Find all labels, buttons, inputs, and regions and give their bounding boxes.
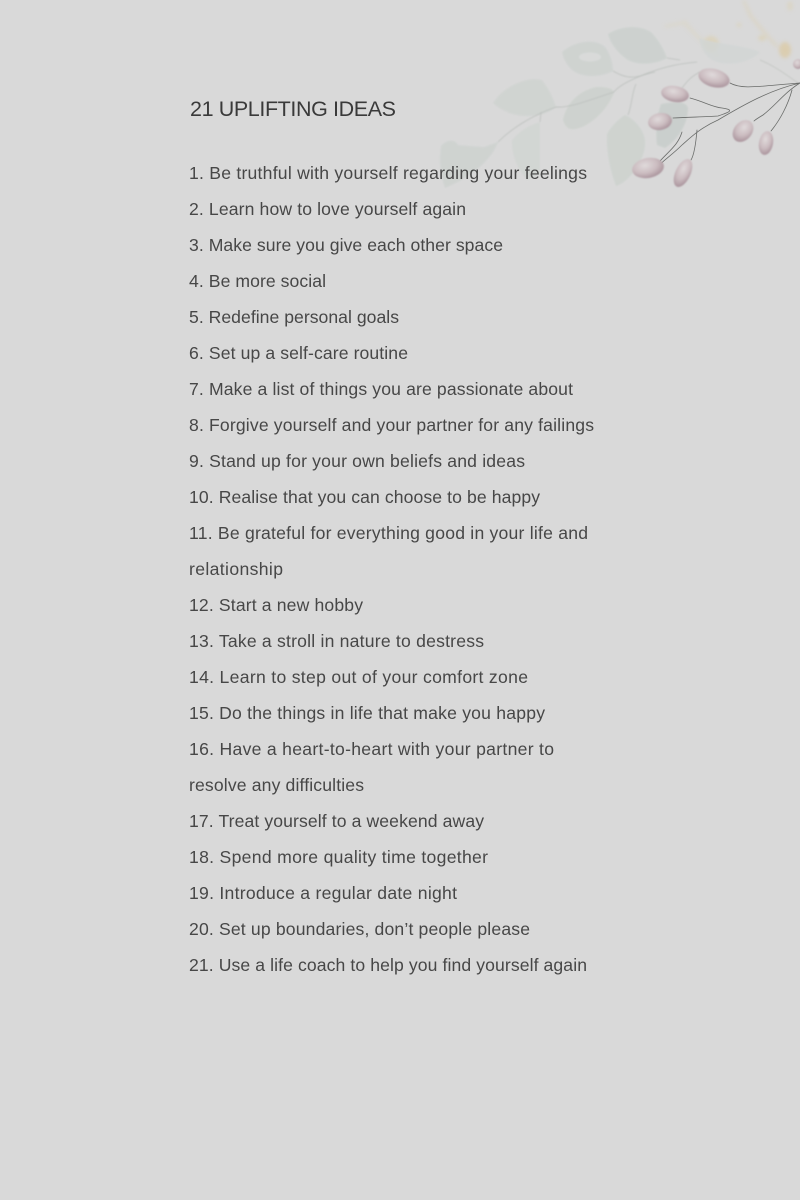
- item 13: 13. Take a stroll in nature to destress: [189, 631, 484, 651]
- item 6: 6. Set up a self-care routine: [189, 343, 408, 363]
- item 20: 20. Set up boundaries, don’t people please: [189, 919, 530, 939]
- item 8: 8. Forgive yourself and your partner for any failings: [189, 415, 594, 435]
- item 9: 9. Stand up for your own beliefs and ideas: [189, 451, 525, 471]
- item 15: 15. Do the things in life that make you happy: [189, 703, 545, 723]
- item 2: 2. Learn how to love yourself again: [189, 199, 466, 219]
- item 1: 1. Be truthful with yourself regarding your feelings: [189, 163, 587, 183]
- item 16: 16. Have a heart-to-heart with your partner to: [189, 739, 554, 759]
- pale stems: [498, 58, 798, 142]
- item 18: 18. Spend more quality time together: [189, 847, 488, 867]
- item 3: 3. Make sure you give each other space: [189, 235, 503, 255]
- item 21: 21. Use a life coach to help you find yourself again: [189, 955, 587, 975]
- faint gold sprigs: [664, 0, 793, 58]
- item 4: 4. Be more social: [189, 271, 326, 291]
- dark stems: [660, 83, 800, 165]
- item 5: 5. Redefine personal goals: [189, 307, 399, 327]
- item 12: 12. Start a new hobby: [189, 595, 363, 615]
- item 19: 19. Introduce a regular date night: [189, 883, 457, 903]
- item 16: resolve any difficulties: [189, 775, 364, 795]
- list of 21 ideas: [189, 163, 594, 975]
- item 11: relationship: [189, 559, 283, 579]
- title: 21 UPLIFTING IDEAS: [190, 97, 396, 121]
- illustration: watercolour branch: [440, 0, 800, 190]
- leaf cluster: [440, 27, 688, 188]
- buds: [631, 59, 800, 190]
- item 14: 14. Learn to step out of your comfort zone: [189, 667, 528, 687]
- item 10: 10. Realise that you can choose to be happy: [189, 487, 540, 507]
- item 11: 11. Be grateful for everything good in your life and: [189, 523, 588, 543]
- item 7: 7. Make a list of things you are passionate about: [189, 379, 573, 399]
- pale leaf near gold: [699, 38, 760, 64]
- item 17: 17. Treat yourself to a weekend away: [189, 811, 484, 831]
- item 16: [189, 739, 554, 795]
- item 11: [189, 523, 588, 579]
